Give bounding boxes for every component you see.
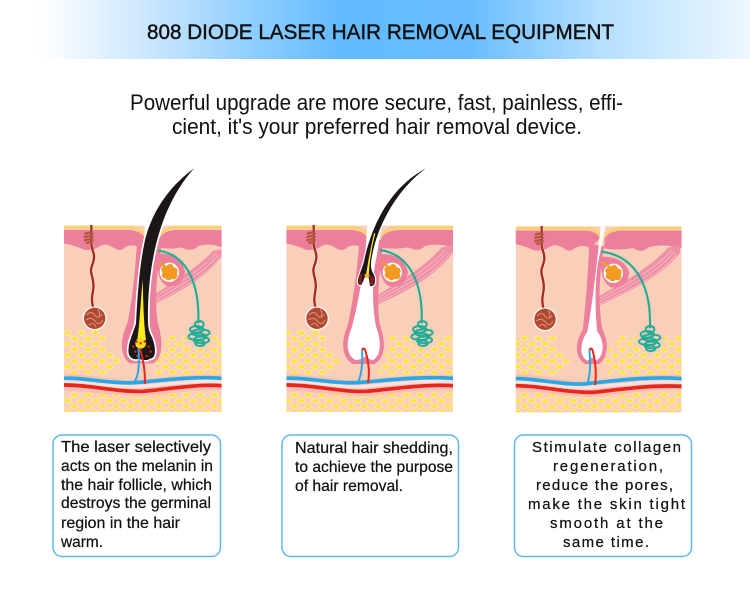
callout 3: reduce the pores, [536,477,673,494]
intro text [130,90,623,139]
teal duct [408,318,436,349]
skin diagram 1: laser acting on follicle [64,168,222,412]
shedding hair [358,168,426,286]
callout 1: destroys the germinal [61,495,211,512]
callout 1: acts on the melanin in [61,458,213,475]
muscle [153,249,222,305]
teal duct [636,325,664,352]
empty follicle [343,240,384,364]
header banner [0,0,750,59]
hair [128,168,194,360]
gland [604,264,623,283]
callout 2 [282,435,458,556]
callout 1: the hair follicle, which [61,477,212,494]
gland [160,263,179,282]
skin diagram 2: natural hair shedding [286,168,453,412]
muscle [597,245,680,307]
follicle sheath [122,238,162,363]
callout 2: to achieve the purpose [295,459,453,476]
muscle [376,245,453,305]
empty follicle [577,243,607,364]
gland [383,263,402,282]
callout 2: Natural hair shedding, [295,440,453,457]
callout 1: warm. [60,534,103,551]
teal duct [185,318,213,349]
callout 3: same time. [563,534,649,551]
callout 3 [514,435,692,556]
callout 3: smooth at the [550,515,663,532]
intro text: cient, it's your preferred hair removal device. [172,114,582,139]
callout 1 [53,435,220,556]
skin diagram 3: tightened pores [516,226,682,412]
callout 3: make the skin tight [528,496,686,513]
title: 808 DIODE LASER HAIR REMOVAL EQUIPMENT [147,21,614,44]
callout 1: The laser selectively [61,439,211,456]
callout 2: of hair removal. [295,478,403,495]
callout 1: region in the hair [61,515,180,532]
intro text: Powerful upgrade are more secure, fast, painless, effi- [130,90,623,115]
callout 3: regeneration, [553,458,663,475]
callout 3: Stimulate collagen [532,439,681,456]
